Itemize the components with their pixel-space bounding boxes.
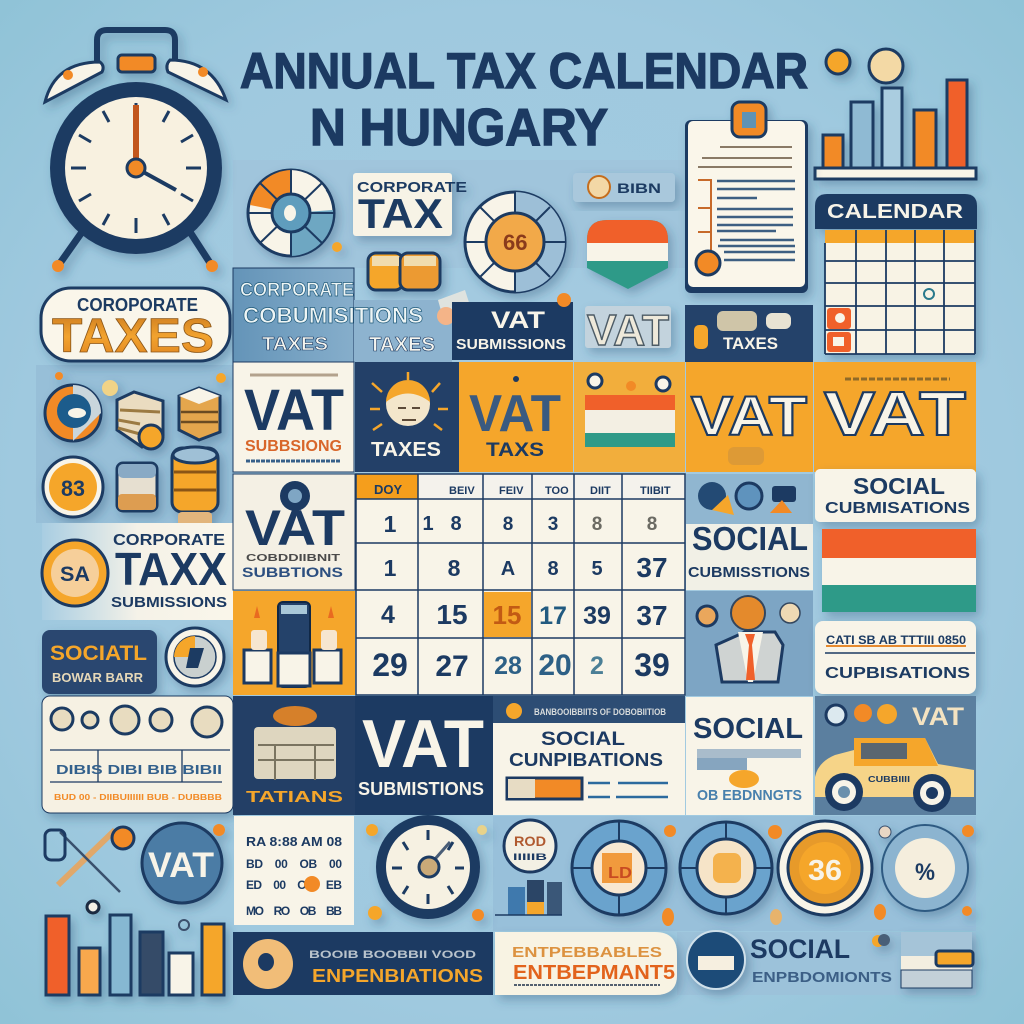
panel: small calendar tile: RA 8:88 AM 08 bbox=[246, 834, 342, 849]
social enpbdomionts text: SOCIAL bbox=[750, 934, 850, 964]
panel: VAT submissions large navy: SUBMISTIONS bbox=[358, 779, 484, 799]
highlighted day bbox=[484, 592, 531, 637]
panel: shaded footer band bbox=[677, 932, 976, 995]
panel: social navy tag bbox=[42, 630, 157, 694]
panel: VAT submissions navy: SUBMISSIONS bbox=[456, 336, 566, 353]
panel: taxes face tile: TAXES bbox=[371, 439, 441, 461]
panel: corporate taxx bbox=[42, 523, 233, 620]
panel: corporate taxx: SUBMISSIONS bbox=[111, 594, 227, 611]
panel: small calendar tile: MO RO OB BB bbox=[246, 904, 342, 918]
panel: shaded centre upper band bbox=[233, 160, 685, 268]
panel: VAT submissions large navy: VAT bbox=[362, 706, 484, 782]
calendar: top right bbox=[815, 194, 977, 354]
panel: social tile with blurred lines: SOCIAL bbox=[693, 713, 803, 745]
panel: left finance icons: 83 bbox=[61, 476, 85, 501]
icon: orange seal: SA bbox=[60, 563, 90, 586]
panel: VAT submissions white tile: VAT bbox=[245, 500, 345, 556]
panel: social cubmisations card bbox=[815, 469, 976, 522]
panel: VAT orange tile 1 bbox=[686, 362, 813, 472]
panel: small calendar tile: ED 00 OB EB bbox=[246, 878, 342, 892]
panel: band of blue tiles: TAXES bbox=[369, 334, 435, 356]
panel: VAT submissions white tile: COBDDIIBNIT bbox=[246, 553, 340, 564]
icon: pencil tip bbox=[437, 290, 472, 325]
central calendar bbox=[356, 474, 685, 695]
panel: corporate taxx: TAXX bbox=[115, 543, 227, 595]
panel: social navy tag: SOCIATL bbox=[50, 642, 147, 665]
decorative coins row bbox=[662, 825, 886, 926]
panel: taxes face tile bbox=[355, 362, 459, 472]
panel: navy taxes tile: TAXES bbox=[723, 334, 778, 353]
panel: VAT orange tile 2: VAT bbox=[824, 380, 966, 449]
panel: shaded lower band bbox=[493, 816, 976, 931]
calendar numbers: 8 bbox=[503, 514, 513, 535]
icon: car: CUBBIIII bbox=[868, 775, 910, 784]
calendar numbers: 1 bbox=[384, 555, 397, 581]
panel: social cunpibations tile bbox=[493, 696, 685, 815]
panel: VAT orange tile 1: VAT bbox=[691, 384, 807, 447]
icon: dial with orange centre: 66 bbox=[503, 230, 527, 255]
panel: VAT taxs tile: TAXS bbox=[486, 440, 544, 461]
panel: VAT submissions navy bbox=[452, 293, 573, 360]
panel: navy band with enterprise text: ENPENBIATIONS bbox=[312, 966, 483, 986]
calendar numbers: 17 bbox=[539, 602, 567, 630]
icon: blue dial 2 bbox=[680, 822, 772, 914]
panel: corporate tax card: CORPORATE bbox=[357, 179, 467, 196]
calendar numbers: 8 bbox=[647, 514, 657, 535]
calendar numbers: A bbox=[501, 558, 515, 580]
title bbox=[240, 43, 808, 157]
calendar numbers: 2 bbox=[590, 652, 604, 680]
calendar numbers: 37 bbox=[636, 552, 668, 583]
calendar header: DIIT bbox=[590, 485, 611, 497]
icon: blue dial 1: LD bbox=[608, 865, 632, 882]
icon: wall clock bbox=[366, 815, 487, 921]
icon: small seal bbox=[166, 628, 224, 686]
panel: band of blue tiles: COBUMISITIONS bbox=[243, 303, 423, 328]
icon: pie wheel bbox=[248, 170, 342, 256]
social enpbdomionts text: ENPBDOMIONTS bbox=[752, 969, 892, 986]
icon: VAT circle bbox=[142, 823, 225, 903]
panel: flag tile bbox=[574, 362, 685, 472]
calendar numbers: 4 bbox=[381, 601, 395, 629]
icon: Hungarian flag bbox=[822, 529, 976, 612]
panel: VAT orange tile 2 bbox=[814, 362, 976, 472]
panel: VAT car tile: VAT bbox=[912, 703, 964, 731]
calendar numbers: 3 bbox=[548, 514, 558, 535]
icon: blue dial 1 bbox=[572, 821, 666, 915]
panel: social cunpibations tile: CUNPIBATIONS bbox=[509, 750, 663, 770]
panel: VAT car tile bbox=[815, 696, 976, 815]
panel: taxes navy tile bbox=[233, 696, 355, 815]
icon: coin stacks bbox=[368, 253, 440, 290]
calendar numbers: 39 bbox=[634, 647, 670, 683]
panel: band of blue tiles bbox=[233, 268, 452, 362]
panel: social cubmisations card: SOCIAL bbox=[853, 473, 945, 499]
icon: navy circle bbox=[687, 931, 745, 989]
calendar numbers: 15 bbox=[436, 599, 468, 630]
panel: social cubmissions light tile: CUBMISSTIONS bbox=[688, 564, 810, 581]
panel: VAT subbsiong tile: SUBBSIONG bbox=[245, 438, 342, 455]
calendar numbers: 29 bbox=[372, 647, 408, 683]
calendar numbers bbox=[372, 511, 670, 683]
icon: Hungarian shield bbox=[587, 220, 668, 289]
panel: small calendar tile bbox=[234, 816, 354, 925]
panel: corporate tax card bbox=[353, 173, 467, 237]
document clipboard bbox=[685, 102, 808, 293]
title: N HUNGARY bbox=[310, 99, 608, 157]
panel: lower right card: CUPBISATIONS bbox=[825, 665, 970, 682]
calendar numbers: 8 bbox=[450, 513, 462, 535]
label chip bbox=[573, 173, 675, 202]
panel: left finance icons bbox=[43, 372, 226, 528]
icon: orange dial bbox=[778, 821, 872, 915]
panel: schedule table bbox=[42, 696, 233, 813]
panel: lower right card: CATI SB AB TTTIII 0850 bbox=[826, 633, 966, 647]
panel: lower right card bbox=[815, 621, 976, 694]
bar chart: bottom left bbox=[46, 901, 224, 995]
icon: VAT circle: VAT bbox=[148, 846, 214, 885]
icon: small badge with bars: IIIIIB bbox=[513, 852, 548, 862]
title: ANNUAL TAX CALENDAR bbox=[240, 43, 808, 99]
panel: VAT taxs tile: VAT bbox=[469, 385, 561, 443]
panel: small calendar tile: BD 00 OB 00 bbox=[246, 857, 342, 871]
panel: corporate taxes pill: COROPORATE bbox=[77, 295, 198, 315]
panel: businessman tile bbox=[686, 591, 813, 696]
icon: car bbox=[815, 738, 974, 812]
calendar numbers: 8 bbox=[592, 514, 602, 535]
alarm clock bbox=[45, 30, 226, 272]
panel: band of blue tiles: TAXES bbox=[262, 334, 328, 354]
panel: social cunpibations tile: SOCIAL bbox=[541, 729, 625, 750]
panel: social cubmissions light tile: SOCIAL bbox=[692, 520, 808, 557]
social enpbdomionts text bbox=[750, 934, 892, 986]
panel: phone icons tile bbox=[233, 591, 355, 695]
icon: orange seal bbox=[42, 540, 108, 606]
icon: dial with orange centre bbox=[465, 192, 565, 292]
calendar numbers: 5 bbox=[591, 558, 603, 580]
calendar numbers: 1 bbox=[384, 511, 397, 537]
calendar numbers: 8 bbox=[448, 555, 461, 581]
VAT badge: VAT bbox=[587, 306, 669, 355]
panel: social cubmisations card: CUBMISATIONS bbox=[825, 500, 970, 517]
panel: corporate taxes pill bbox=[41, 288, 230, 363]
panel: schedule table: DIBIS DIBI BIB BIBII bbox=[56, 762, 222, 777]
calendar numbers: 8 bbox=[547, 558, 559, 580]
panel: corporate taxes pill: TAXES bbox=[52, 310, 214, 363]
calendar header: TIIBIT bbox=[640, 485, 671, 497]
panel: social tile with blurred lines bbox=[686, 697, 813, 815]
panel: shaded left icon area bbox=[36, 365, 233, 523]
calendar header: FEIV bbox=[499, 485, 524, 497]
panel: VAT subbsiong tile: VAT bbox=[244, 378, 344, 443]
calendar numbers: 20 bbox=[538, 649, 572, 682]
panel: VAT submissions navy: VAT bbox=[491, 307, 545, 334]
panel: taxes navy tile: TATIANS bbox=[246, 789, 343, 806]
panel: enterprise pill bbox=[495, 932, 677, 995]
panel: enterprise pill: ENTBEPMANT5 bbox=[513, 962, 675, 984]
icon: crossed tools bbox=[45, 827, 134, 892]
panel: social navy tag: BOWAR BARR bbox=[52, 670, 144, 685]
panel: VAT submissions large navy bbox=[355, 696, 493, 815]
icon: small badge with bars bbox=[495, 820, 562, 915]
panel: navy band with enterprise text bbox=[233, 932, 493, 995]
panel: social tile with blurred lines: OB EBDNNGTS bbox=[697, 787, 802, 804]
calendar header: TOO bbox=[545, 485, 569, 497]
icon: stacked drawers bbox=[872, 932, 973, 988]
panel: VAT submissions white tile: SUBBTIONS bbox=[242, 564, 343, 580]
panel: social cunpibations tile: BANBOOIBBIITS OF DOBOBIITIOB bbox=[534, 707, 666, 717]
panel: schedule table: BUD 00 - DIIBUIIIIII BUB - DUBBBB bbox=[54, 793, 222, 802]
corporate submissions text: CORPORATE bbox=[240, 280, 354, 301]
panel: corporate tax card: TAX bbox=[358, 190, 443, 237]
panel: navy band with enterprise text: BOOIB BOOBBII VOOD bbox=[309, 949, 476, 961]
calendar header: BEIV bbox=[449, 485, 475, 497]
calendar numbers: 1 bbox=[422, 513, 434, 535]
panel: navy taxes tile bbox=[685, 305, 813, 362]
icon: cream dial bbox=[879, 825, 974, 916]
bar chart: top right bbox=[815, 49, 976, 179]
panel: enterprise pill: ENTPEBBABLES bbox=[512, 944, 662, 961]
calendar numbers: 27 bbox=[435, 650, 469, 683]
panel: VAT submissions white tile bbox=[233, 474, 355, 590]
icon: orange dial: 36 bbox=[808, 855, 842, 887]
calendar: top right: CALENDAR bbox=[827, 201, 964, 223]
calendar header bbox=[356, 474, 684, 499]
calendar numbers: 37 bbox=[636, 600, 668, 631]
icon: small badge with bars: ROD bbox=[514, 833, 546, 849]
panel: corporate taxx: CORPORATE bbox=[113, 532, 225, 549]
calendar numbers: 39 bbox=[583, 602, 611, 630]
icon: cream dial: % bbox=[915, 859, 935, 886]
calendar numbers: 28 bbox=[494, 652, 522, 680]
calendar numbers: 15 bbox=[493, 600, 521, 630]
panel: social cubmissions light tile bbox=[686, 474, 813, 590]
calendar header: DOY bbox=[374, 482, 402, 497]
panel: VAT taxs tile bbox=[459, 362, 573, 472]
panel: VAT subbsiong tile bbox=[233, 362, 354, 472]
label chip: BIBN bbox=[617, 180, 661, 196]
